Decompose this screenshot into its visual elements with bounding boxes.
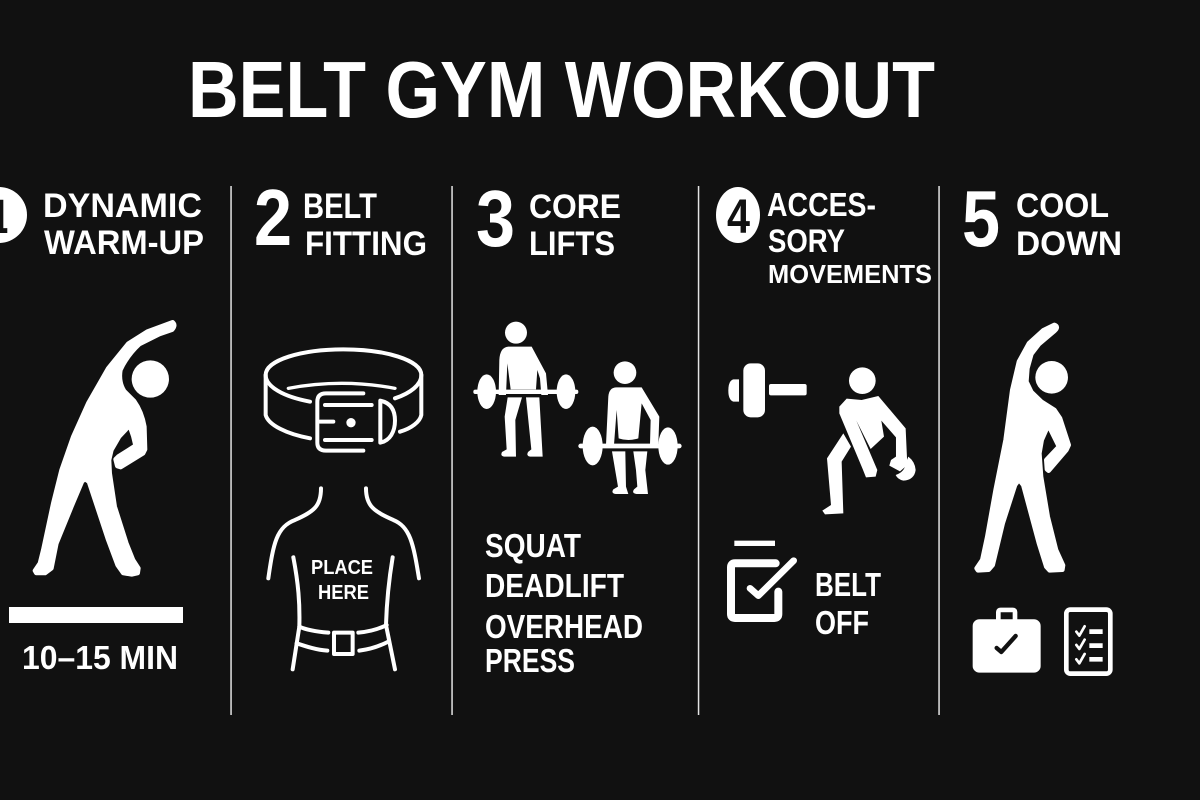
heading: belt fitting: BELT xyxy=(303,187,377,226)
icon: dumbbell xyxy=(728,363,807,417)
panel: step 5 cool down xyxy=(962,174,1122,674)
heading: cool down: COOL xyxy=(1016,187,1109,225)
icon: cool-down stretch figure xyxy=(977,325,1069,570)
heading: core lifts xyxy=(529,188,621,263)
panel: step 4 accessory movements xyxy=(716,186,932,641)
label: place here xyxy=(311,557,373,604)
duration label: 10–15 MIN xyxy=(22,639,178,676)
label: belt off xyxy=(815,566,881,641)
text: lift list: OVERHEAD xyxy=(485,608,643,645)
panel: step 3 core lifts xyxy=(473,174,682,679)
heading: dynamic warm-up xyxy=(43,187,204,262)
icon: standing lifter with barbell xyxy=(473,322,578,457)
panel: step 1 dynamic warm-up xyxy=(0,187,204,676)
icon: kettlebell swing figure xyxy=(822,367,916,514)
icon: belt off checkbox xyxy=(731,541,794,618)
text: lift list: PRESS xyxy=(485,642,575,679)
label: belt off: BELT xyxy=(815,566,881,603)
icon: deadlift lifter with barbell xyxy=(578,361,682,494)
progress bar xyxy=(9,607,183,623)
title: BELT GYM WORKOUT xyxy=(188,45,935,134)
heading: core lifts: LIFTS xyxy=(529,225,615,263)
step number 4: 4 xyxy=(727,191,750,244)
step number 5: 5 xyxy=(962,174,1000,263)
heading: accessory movements: MOVEMENTS xyxy=(768,259,932,289)
step number 4 xyxy=(716,187,760,244)
heading: accessory movements: SORY xyxy=(768,223,845,259)
heading: accessory movements xyxy=(767,186,932,289)
label: place here: HERE xyxy=(318,582,369,604)
heading: accessory movements: ACCES- xyxy=(767,186,876,223)
icon: checklist xyxy=(1066,610,1110,674)
text: lift list: DEADLIFT xyxy=(485,567,624,604)
heading: cool down xyxy=(1016,187,1122,263)
heading: belt fitting xyxy=(303,187,427,263)
label: belt off: OFF xyxy=(815,604,869,641)
heading: dynamic warm-up: WARM-UP xyxy=(44,224,204,262)
icon: torso with belt placement xyxy=(268,488,419,669)
heading: cool down: DOWN xyxy=(1016,225,1122,263)
label: place here: PLACE xyxy=(311,557,373,579)
heading: dynamic warm-up: DYNAMIC xyxy=(43,187,202,225)
text: lift list xyxy=(485,527,643,679)
icon: side stretch figure xyxy=(35,322,174,574)
step number 2: 2 xyxy=(254,173,292,262)
panel: step 2 belt fitting xyxy=(254,173,427,669)
heading: belt fitting: FITTING xyxy=(305,225,427,263)
icon: gym bag xyxy=(973,610,1041,673)
text: lift list: SQUAT xyxy=(485,527,581,564)
icon: weightlifting belt xyxy=(266,349,421,451)
heading: core lifts: CORE xyxy=(529,188,621,226)
step number 3: 3 xyxy=(476,174,515,263)
